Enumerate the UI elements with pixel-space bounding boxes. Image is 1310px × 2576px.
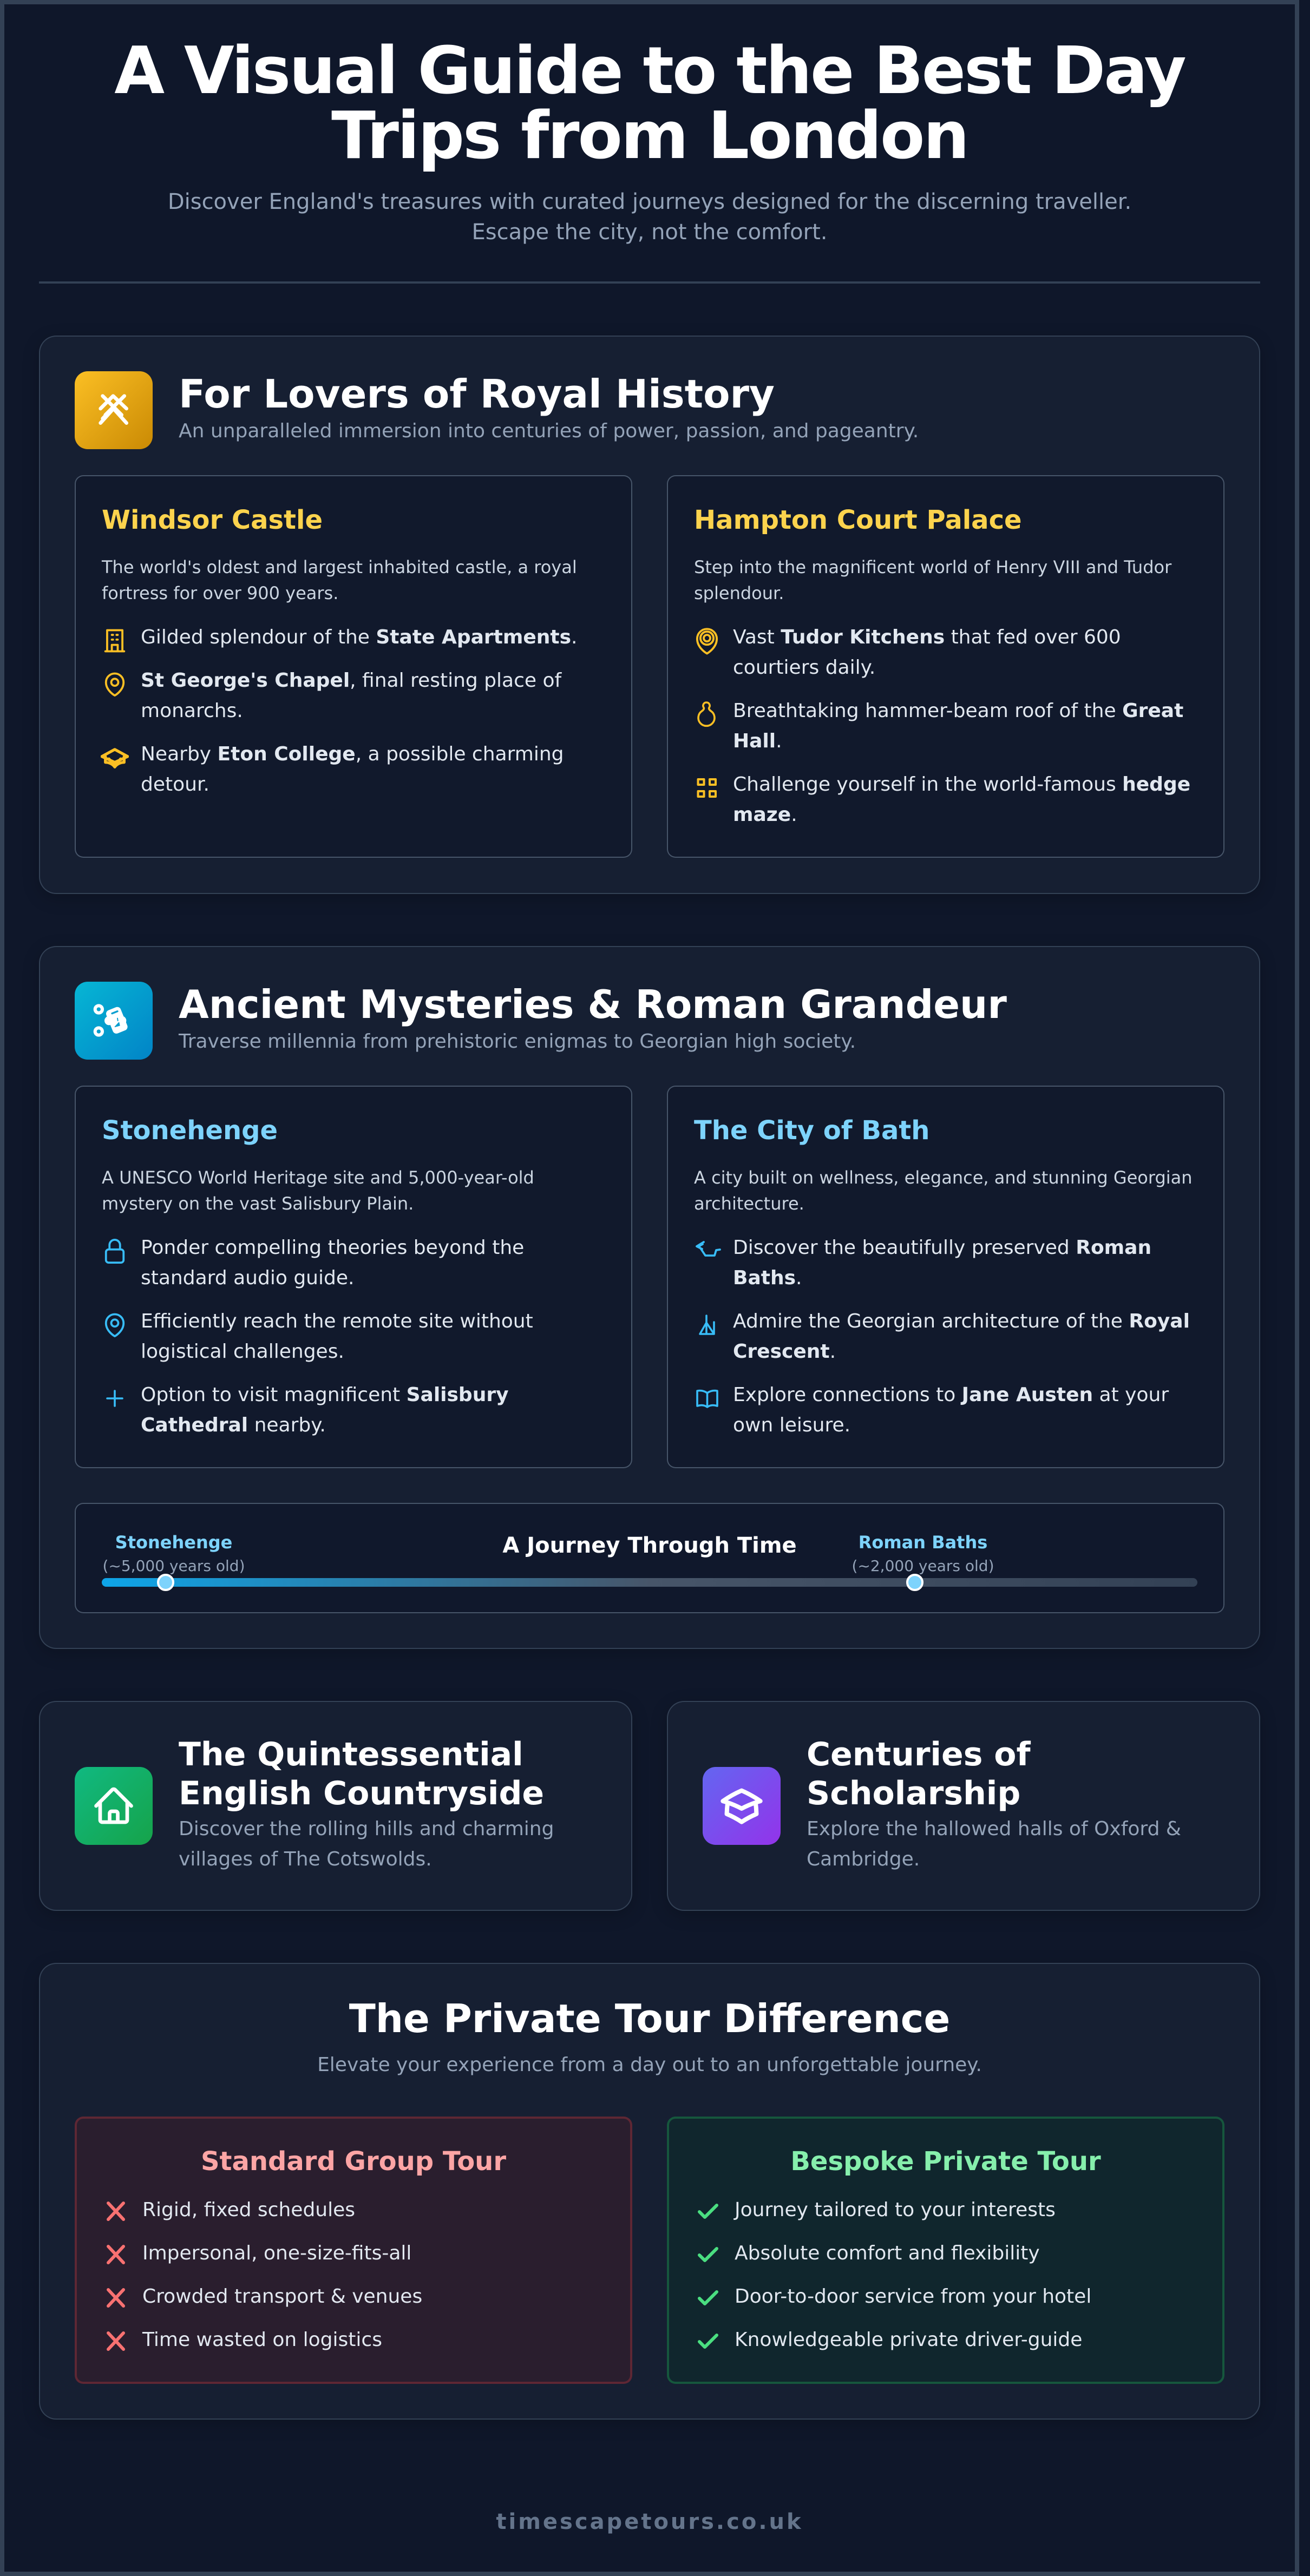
- list item: Royal Crescent: [699, 1310, 1190, 1363]
- description: [179, 1817, 554, 1870]
- heading: Scholarship: [807, 1775, 1020, 1812]
- comparison: bespoke private tour: [667, 2117, 1224, 2384]
- list item: Tudor Kitchens: [696, 626, 1121, 679]
- card heading: Stonehenge: [102, 1115, 278, 1146]
- benefit: comfort: Absolute comfort and flexibility: [735, 2242, 1040, 2264]
- comparison heading: Standard Group Tour: [201, 2146, 506, 2177]
- card heading: Windsor Castle: [102, 505, 323, 535]
- benefit: tailored: [694, 2195, 1197, 2225]
- list item: hedge maze: Challenge yourself in the world-famous hedge: [733, 773, 1190, 796]
- description: villages of The Cotswolds.: [179, 1848, 432, 1870]
- card heading: Hampton Court Palace: [694, 505, 1022, 535]
- timeline label: Stonehenge: Stonehenge: [115, 1532, 232, 1553]
- card: The City of Bath: [667, 1086, 1224, 1468]
- list item: theories: standard audio guide.: [141, 1267, 354, 1289]
- list item: theories: Ponder compelling theories beyond the: [141, 1237, 524, 1259]
- list item: Salisbury Cathedral: [106, 1384, 509, 1436]
- card description: splendour.: [694, 582, 784, 603]
- card description: mystery on the vast Salisbury Plain.: [102, 1193, 414, 1213]
- list item: Roman Baths: [696, 1237, 1151, 1289]
- timeline age: Roman Baths: (~2,000 years old): [852, 1557, 994, 1575]
- list item: Salisbury Cathedral: Cathedral nearby.: [141, 1414, 326, 1436]
- card: Windsor Castle: [75, 475, 632, 858]
- marker: Stonehenge: [157, 1574, 174, 1591]
- benefit: door-to-door: [694, 2282, 1197, 2312]
- panel: scholarship: [667, 1701, 1260, 1911]
- list item: Tudor Kitchens: courtiers daily.: [733, 656, 875, 679]
- heading: Ancient Mysteries & Roman Grandeur: [179, 982, 1007, 1027]
- drawback: crowded: Crowded transport & venues: [142, 2285, 422, 2308]
- card description: A UNESCO World Heritage site and 5,000-year-old: [102, 1167, 534, 1187]
- benefit: comfort: [694, 2238, 1197, 2269]
- heading: The Private Tour Difference: [349, 1996, 950, 2041]
- drawback: time wasted: [102, 2325, 605, 2355]
- list item: Great Hall: Breathtaking hammer-beam roof of the Great: [733, 700, 1183, 722]
- card: Stonehenge: [75, 1086, 632, 1468]
- list item: Jane Austen: Explore connections to Jane Austen at your: [733, 1384, 1169, 1406]
- list item: Roman Baths: Baths.: [733, 1267, 802, 1289]
- list item: State Apartments: Gilded splendour of the State Apartments.: [141, 626, 577, 648]
- description: Discover the rolling hills and charming: [179, 1817, 554, 1840]
- card description: architecture.: [694, 1193, 804, 1213]
- drawback: crowded: [102, 2282, 605, 2312]
- drawback: schedules: Rigid, fixed schedules: [142, 2199, 355, 2221]
- section subtitle: Elevate your experience from a day out to an unforgettable journey.: [317, 2053, 982, 2076]
- card description: Step into the magnificent world of Henry VIII and Tudor: [694, 556, 1171, 577]
- title: [114, 34, 1185, 174]
- list item: Eton College: detour.: [141, 773, 209, 796]
- card description: [102, 556, 577, 603]
- list item: hedge maze: [697, 773, 1190, 826]
- subtitle: Discover England's treasures with curated journeys designed for the discerning traveller.: [168, 189, 1131, 214]
- drawback: schedules: [102, 2195, 605, 2225]
- card description: [694, 556, 1171, 603]
- card description: [102, 1167, 534, 1213]
- list item: Great Hall: Hall.: [733, 730, 782, 752]
- panel: private tour difference: [39, 1963, 1260, 2420]
- benefit: door-to-door: Door-to-door service from your hotel: [735, 2285, 1091, 2308]
- drawback: impersonal: [102, 2238, 605, 2269]
- heading: The Quintessential: [179, 1736, 523, 1773]
- timeline label: Roman Baths: Roman Baths: [859, 1532, 987, 1553]
- subtitle: [168, 189, 1131, 245]
- section subtitle: An unparalleled immersion into centuries of power, passion, and pageantry.: [179, 420, 919, 442]
- icon: crossed swords: [75, 371, 153, 449]
- list item: reach the site: logistical challenges.: [141, 1340, 344, 1363]
- list item: St George's Chapel: St George's Chapel, final resting place of: [141, 669, 561, 692]
- drawback: time wasted: Time wasted on logistics: [142, 2329, 382, 2351]
- timeline: A Journey Through Time: [75, 1503, 1224, 1613]
- card description: A city built on wellness, elegance, and stunning Georgian: [694, 1167, 1193, 1187]
- list item: Great Hall: [697, 700, 1183, 752]
- card description: [694, 1167, 1193, 1213]
- subtitle: Escape the city, not the comfort.: [472, 220, 827, 245]
- list item: Eton College: [101, 743, 564, 796]
- panel: ancient mysteries: [39, 946, 1260, 1649]
- timeline heading: A Journey Through Time: [502, 1533, 797, 1558]
- heading: [179, 1736, 544, 1812]
- list item: Jane Austen: [696, 1384, 1169, 1436]
- footer: timescapetours.co.uk: [496, 2509, 803, 2534]
- list item: Salisbury Cathedral: Option to visit magnificent Salisbury: [141, 1384, 509, 1406]
- card: Hampton Court Palace: [667, 475, 1224, 858]
- section header: royal history: [75, 371, 919, 449]
- section subtitle: Traverse millennia from prehistoric enigmas to Georgian high society.: [179, 1030, 856, 1053]
- panel: English countryside: [39, 1701, 632, 1911]
- comparison: standard group tour: [75, 2117, 632, 2384]
- list item: Royal Crescent: Crescent.: [733, 1340, 836, 1363]
- title: A Visual Guide to the Best Day: [114, 34, 1185, 109]
- heading: English Countryside: [179, 1775, 544, 1812]
- list item: Royal Crescent: Admire the Georgian architecture of the Royal: [733, 1310, 1190, 1332]
- list item: reach the site: [105, 1310, 533, 1363]
- benefit: driver-guide: [694, 2325, 1197, 2355]
- timeline bar: [102, 1578, 1197, 1587]
- timeline age: Stonehenge: (~5,000 years old): [102, 1557, 245, 1575]
- description: Explore the hallowed halls of Oxford &: [807, 1817, 1181, 1840]
- heading: Centuries of: [807, 1736, 1031, 1773]
- heading: For Lovers of Royal History: [179, 371, 775, 417]
- list item: St George's Chapel: [105, 669, 562, 722]
- list item: reach the site: Efficiently reach the remote site without: [141, 1310, 533, 1332]
- list item: Eton College: Nearby Eton College, a possible charming: [141, 743, 564, 765]
- drawback: impersonal: Impersonal, one-size-fits-all: [142, 2242, 411, 2264]
- section header: ancient mysteries: [75, 982, 1007, 1060]
- icon: standing stones: [75, 982, 153, 1060]
- list item: Roman Baths: Discover the beautifully preserved Roman: [733, 1237, 1151, 1259]
- panel: royal history: [39, 336, 1260, 894]
- card description: fortress for over 900 years.: [102, 582, 338, 603]
- list item: theories: [105, 1237, 524, 1289]
- list item: St George's Chapel: monarchs.: [141, 700, 243, 722]
- list item: hedge maze: maze.: [733, 804, 797, 826]
- card description: The world's oldest and largest inhabited castle, a royal: [102, 556, 577, 577]
- description: [807, 1814, 1181, 1875]
- list item: Tudor Kitchens: Vast Tudor Kitchens that fed over 600: [733, 626, 1121, 648]
- comparison heading: Bespoke Private Tour: [790, 2146, 1101, 2177]
- title: Trips from London: [331, 98, 968, 174]
- icon: house: [75, 1767, 153, 1845]
- card heading: The City of Bath: [694, 1115, 929, 1146]
- benefit: tailored: Journey tailored to your interests: [735, 2199, 1056, 2221]
- marker: Roman Baths: [906, 1574, 923, 1591]
- description: Cambridge.: [807, 1848, 920, 1870]
- benefit: driver-guide: Knowledgeable private driver-guide: [735, 2329, 1082, 2351]
- heading: [807, 1735, 1031, 1813]
- list item: Jane Austen: own leisure.: [733, 1414, 850, 1436]
- icon: academic cap: [703, 1767, 781, 1845]
